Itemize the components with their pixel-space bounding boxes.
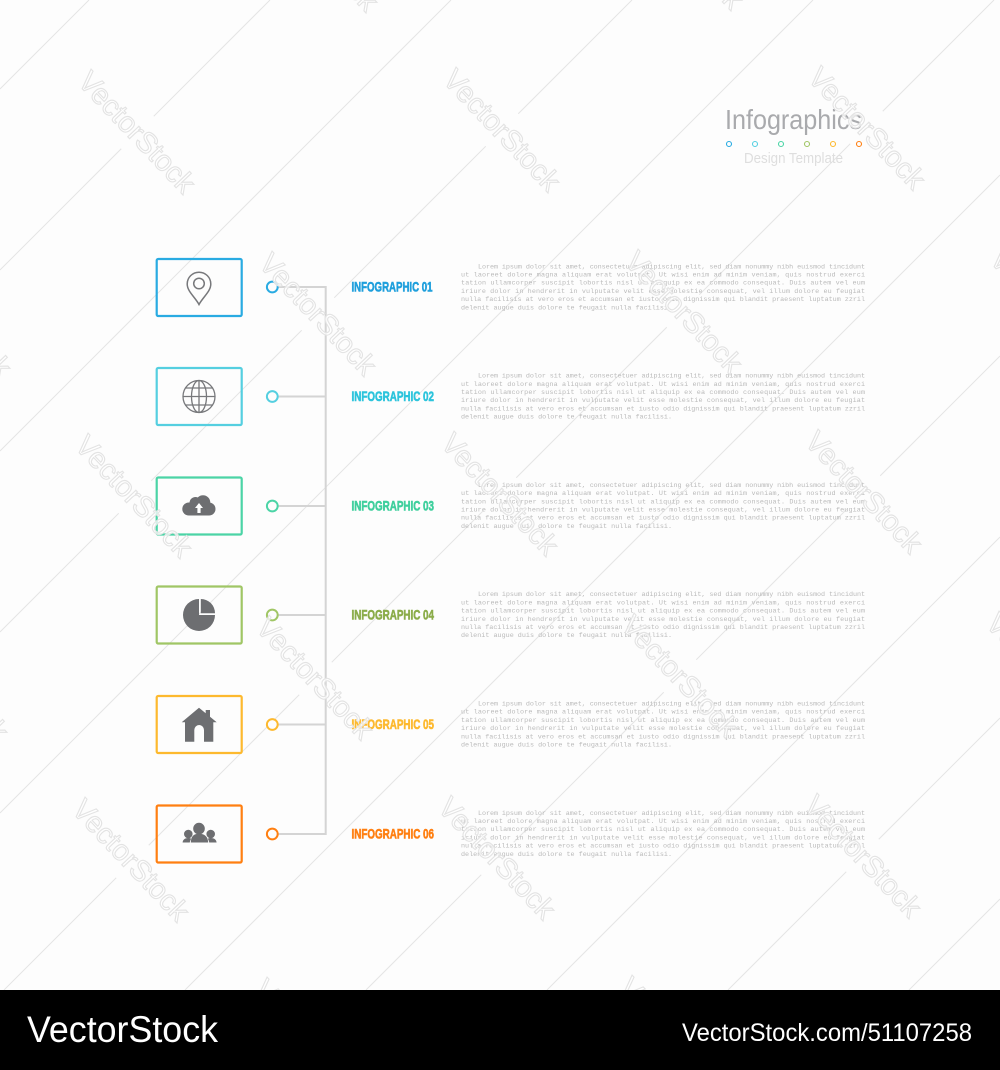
- icon: house: [182, 708, 217, 742]
- text block 01: tation ullamcorper suscipit lobortis nisl ut aliquip ex ea commodo consequat. Duis autem vel eum: [461, 280, 865, 288]
- panel: item 05: [157, 696, 865, 753]
- watermark pattern: VectorStock: [801, 62, 931, 196]
- text block 02: iriure dolor in hendrerit in vulputate velit esse molestie consequat, vel illum dolore eu feugiat: [461, 397, 865, 405]
- text block 05: Lorem ipsum dolor sit amet, consectetuer adipiscing elit, sed diam nonummy nibh euismod tincidunt: [478, 700, 865, 708]
- text block 03: delenit augue duis dolore te feugait nulla facilisi.: [461, 523, 672, 531]
- node 06: [267, 829, 278, 839]
- text block 02: Lorem ipsum dolor sit amet, consectetuer adipiscing elit, sed diam nonummy nibh euismod tincidunt: [478, 373, 865, 381]
- icon: people: [183, 823, 217, 842]
- title colour dots: [726, 142, 862, 146]
- label 04: INFOGRAPHIC 04: [352, 607, 434, 623]
- watermark pattern: VectorStock: [436, 64, 566, 198]
- watermark pattern: VectorStock: [68, 430, 198, 564]
- text block 02: ut laoreet dolore magna aliquam erat volutpat. Ut wisi enim ad minim veniam, quis nostrud exerci: [461, 381, 865, 389]
- text block 06: ut laoreet dolore magna aliquam erat volutpat. Ut wisi enim ad minim veniam, quis nostrud exerci: [461, 818, 865, 826]
- text block 06: iriure dolor in hendrerit in vulputate velit esse molestie consequat, vel illum dolore eu feugiat: [461, 834, 865, 842]
- title block: [725, 104, 862, 167]
- watermark pattern: VectorStock: [614, 610, 744, 744]
- watermark pattern: VectorStock: [797, 790, 927, 924]
- label 03: INFOGRAPHIC 03: [352, 498, 434, 514]
- panel: item 03: [157, 478, 865, 534]
- text block 03: iriure dolor in hendrerit in vulputate velit esse molestie consequat, vel illum dolore eu feugiat: [461, 506, 865, 514]
- text block 04: ut laoreet dolore magna aliquam erat volutpat. Ut wisi enim ad minim veniam, quis nostrud exerci: [461, 599, 865, 607]
- text block 05: iriure dolor in hendrerit in vulputate velit esse molestie consequat, vel illum dolore eu feugiat: [461, 725, 865, 733]
- icon: location pin: [187, 272, 211, 304]
- footer url: VectorStock.com/51107258: [682, 1019, 972, 1047]
- text block 04: nulla facilisis at vero eros et accumsan et iusto odio dignissim qui blandit praesent luptatum zzril: [461, 624, 865, 632]
- text block 01: Lorem ipsum dolor sit amet, consectetuer adipiscing elit, sed diam nonummy nibh euismod tincidunt: [478, 263, 865, 271]
- node 02: [267, 391, 278, 402]
- text block 03: tation ullamcorper suscipit lobortis nisl ut aliquip ex ea commodo consequat. Duis autem vel eum: [461, 498, 865, 506]
- panel: item 04: [157, 586, 865, 644]
- text block 05: nulla facilisis at vero eros et accumsan et iusto odio dignissim qui blandit praesent luptatum zzril: [461, 733, 865, 741]
- text block 05: delenit augue duis dolore te feugait nulla facilisi.: [461, 742, 672, 750]
- title: Infographics: Infographics: [725, 104, 862, 135]
- text block 01: nulla facilisis at vero eros et accumsan et iusto odio dignissim qui blandit praesent luptatum zzril: [461, 296, 865, 304]
- text block 05: tation ullamcorper suscipit lobortis nisl ut aliquip ex ea commodo consequat. Duis autem vel eum: [461, 717, 865, 725]
- watermark pattern: VectorStock: [434, 428, 564, 562]
- panel: item 02: [157, 368, 865, 425]
- text block 06: delenit augue duis dolore te feugait nulla facilisi.: [461, 851, 672, 859]
- watermark pattern: VectorStock: [798, 426, 928, 560]
- label 05: INFOGRAPHIC 05: [352, 716, 434, 732]
- text block 05: ut laoreet dolore magna aliquam erat volutpat. Ut wisi enim ad minim veniam, quis nostrud exerci: [461, 709, 865, 717]
- node 01: [267, 282, 278, 292]
- node 03: [267, 501, 278, 511]
- icon box 01: [157, 259, 242, 316]
- text block 06: Lorem ipsum dolor sit amet, consectetuer adipiscing elit, sed diam nonummy nibh euismod tincidunt: [478, 810, 865, 818]
- text block 02: tation ullamcorper suscipit lobortis nisl ut aliquip ex ea commodo consequat. Duis autem vel eum: [461, 389, 865, 397]
- icon box 04: [157, 586, 242, 644]
- watermark pattern: VectorStock: [71, 66, 201, 200]
- text block 02: delenit augue duis dolore te feugait nulla facilisi.: [461, 414, 672, 422]
- text block 02: nulla facilisis at vero eros et accumsan et iusto odio dignissim qui blandit praesent luptatum zzril: [461, 405, 865, 413]
- text block 06: tation ullamcorper suscipit lobortis nisl ut aliquip ex ea commodo consequat. Duis autem vel eum: [461, 826, 865, 834]
- node 04: [267, 610, 278, 620]
- node 05: [267, 719, 278, 730]
- text block 01: ut laoreet dolore magna aliquam erat volutpat. Ut wisi enim ad minim veniam, quis nostrud exerci: [461, 272, 865, 280]
- footer bar: [0, 990, 1000, 1070]
- icon: globe: [183, 380, 215, 412]
- text block 01: iriure dolor in hendrerit in vulputate velit esse molestie consequat, vel illum dolore eu feugiat: [461, 288, 865, 296]
- icon box 02: [157, 368, 242, 425]
- icon: pie chart: [183, 599, 215, 631]
- text block 06: nulla facilisis at vero eros et accumsan et iusto odio dignissim qui blandit praesent luptatum zzril: [461, 843, 865, 851]
- text block 03: [461, 482, 865, 531]
- panel: item 01: [157, 259, 865, 316]
- watermark pattern: VectorStock: [252, 248, 382, 382]
- text block 03: nulla facilisis at vero eros et accumsan et iusto odio dignissim qui blandit praesent luptatum zzril: [461, 515, 865, 523]
- connector tree: [277, 286, 326, 835]
- text block 05: [461, 700, 865, 750]
- icon box 06: [157, 806, 242, 862]
- text block 02: [461, 373, 865, 422]
- text block 03: ut laoreet dolore magna aliquam erat volutpat. Ut wisi enim ad minim veniam, quis nostrud exerci: [461, 490, 865, 498]
- icon box 03: [157, 478, 242, 534]
- label 01: INFOGRAPHIC 01: [352, 279, 433, 295]
- watermark pattern: VectorStock: [65, 794, 195, 928]
- text block 04: tation ullamcorper suscipit lobortis nisl ut aliquip ex ea commodo consequat. Duis autem vel eum: [461, 608, 865, 616]
- text block 04: iriure dolor in hendrerit in vulputate velit esse molestie consequat, vel illum dolore eu feugiat: [461, 616, 865, 624]
- icon: cloud upload: [182, 495, 216, 516]
- text block 03: Lorem ipsum dolor sit amet, consectetuer adipiscing elit, sed diam nonummy nibh euismod tincidunt: [478, 482, 865, 490]
- watermark pattern: VectorStock: [249, 612, 379, 746]
- label 02: INFOGRAPHIC 02: [352, 388, 434, 404]
- text block 04: [461, 591, 865, 640]
- label 06: INFOGRAPHIC 06: [352, 826, 434, 842]
- text block 01: [461, 263, 865, 312]
- watermark pattern: VectorStock: [618, 246, 748, 380]
- panel: item 06: [157, 806, 865, 862]
- text block 01: delenit augue duis dolore te feugait nulla facilisi.: [461, 304, 672, 312]
- icon box 05: [157, 696, 242, 753]
- subtitle: Design Template: Design Template: [744, 150, 843, 167]
- text block 04: Lorem ipsum dolor sit amet, consectetuer adipiscing elit, sed diam nonummy nibh euismod tincidunt: [478, 591, 865, 599]
- footer brand: VectorStock: [27, 1009, 218, 1050]
- watermark pattern: VectorStock: [431, 792, 561, 926]
- text block 06: [461, 810, 865, 859]
- text block 04: delenit augue duis dolore te feugait nulla facilisi.: [461, 632, 672, 640]
